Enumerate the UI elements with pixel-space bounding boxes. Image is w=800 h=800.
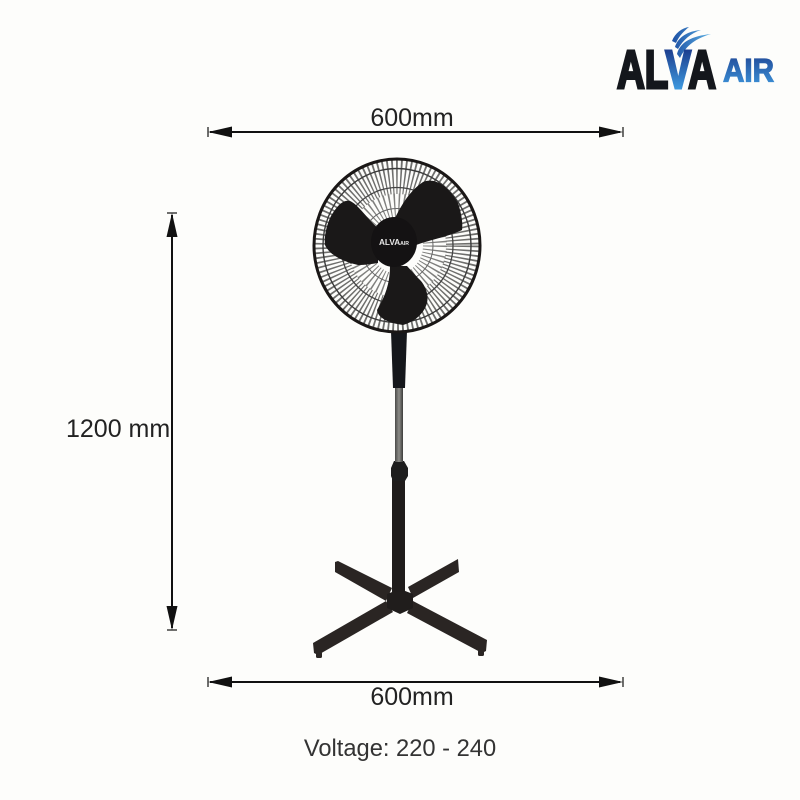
guard rings <box>314 159 480 332</box>
bottom width arrow <box>208 676 623 688</box>
pedestal fan <box>313 159 487 658</box>
voltage note: Voltage: 220 - 240 <box>304 736 496 762</box>
top width arrow <box>208 126 623 138</box>
base arm: top left <box>335 561 392 601</box>
base arm: bottom left <box>313 601 393 655</box>
base arm: bottom right <box>407 601 487 653</box>
base arm: top right <box>408 559 459 598</box>
fan blades <box>325 181 462 325</box>
logo: Alva Air <box>617 27 774 100</box>
logo wordmark AIR: AIR <box>723 52 774 88</box>
blade: left <box>325 201 378 265</box>
dimension: bottom width <box>208 676 623 711</box>
bottom width label: 600mm <box>370 683 454 711</box>
neck <box>391 331 407 388</box>
blade: bottom <box>377 266 428 325</box>
base hub <box>387 589 413 614</box>
height label: 1200 mm <box>66 415 170 443</box>
chrome pole <box>395 386 403 462</box>
fan hub <box>371 217 417 267</box>
hub logo: ALVAAIR <box>379 238 409 247</box>
height arrow <box>166 213 178 630</box>
logo swoosh <box>672 27 711 58</box>
fan guard <box>314 159 480 332</box>
guard radial wires <box>331 177 463 314</box>
fan base <box>313 559 487 658</box>
dimension: height <box>66 213 178 630</box>
dimension: top width <box>208 104 623 138</box>
height collar <box>391 461 408 481</box>
blade: upper right <box>393 181 462 245</box>
lower pole <box>392 476 405 592</box>
top width label: 600mm <box>370 104 454 132</box>
logo wordmark ALVA: ALVA <box>617 40 716 100</box>
